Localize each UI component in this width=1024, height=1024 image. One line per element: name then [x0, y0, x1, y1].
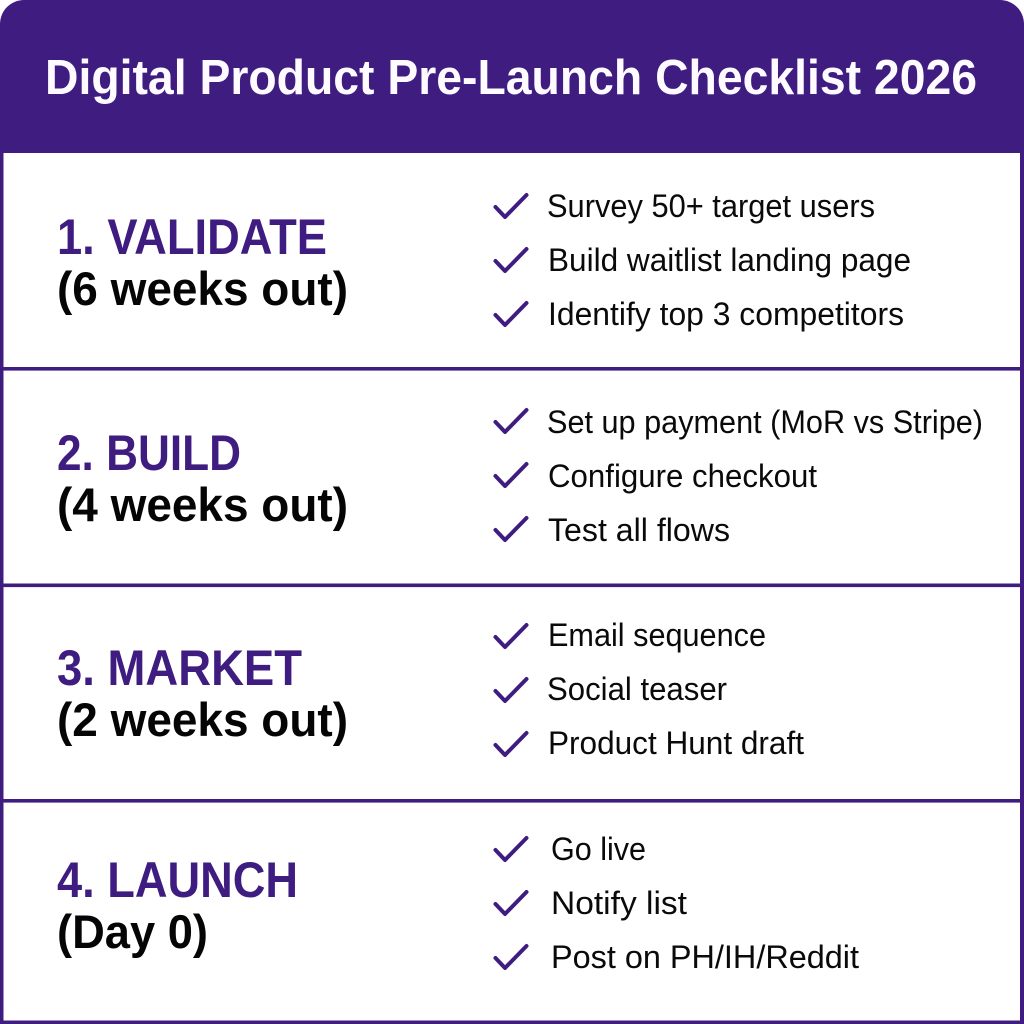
checklist: launch: Post on PH/IH/Reddit	[551, 939, 859, 975]
heading: market: (2 weeks out)	[57, 693, 348, 746]
checklist: build: Set up payment (MoR vs Stripe)	[547, 404, 983, 440]
checklist: validate	[496, 188, 911, 332]
heading: build	[57, 425, 348, 531]
heading: build: 2. BUILD	[57, 425, 241, 481]
panel: market	[57, 617, 804, 761]
heading: market: 3. MARKET	[57, 640, 302, 696]
heading: validate: (6 weeks out)	[57, 262, 348, 315]
heading: validate: 1. VALIDATE	[57, 209, 327, 265]
checklist: build: Configure checkout	[548, 458, 817, 494]
checklist: validate: Survey 50+ target users	[547, 188, 875, 224]
heading: market	[57, 640, 348, 746]
heading: validate	[57, 209, 348, 315]
heading: launch	[57, 852, 298, 958]
checklist: build	[496, 404, 983, 548]
checklist: market: Email sequence	[548, 617, 766, 653]
checklist: market: Product Hunt draft	[548, 725, 804, 761]
checklist: launch	[496, 831, 859, 975]
heading: launch: 4. LAUNCH	[57, 852, 298, 908]
checklist: validate: Identify top 3 competitors	[548, 296, 904, 332]
checklist: launch: Go live	[551, 831, 646, 867]
heading: launch: (Day 0)	[57, 905, 208, 958]
checklist: build: Test all flows	[548, 512, 730, 548]
header band	[0, 0, 1024, 153]
panel: build	[57, 404, 983, 548]
checklist: market	[496, 617, 804, 761]
checklist: validate: Build waitlist landing page	[548, 242, 911, 278]
panel: validate	[57, 188, 911, 332]
title: Digital Product Pre-Launch Checklist 2026	[45, 51, 977, 105]
checklist: launch: Notify list	[551, 885, 687, 921]
checklist: market: Social teaser	[547, 671, 727, 707]
panel: launch	[57, 831, 859, 975]
heading: build: (4 weeks out)	[57, 478, 348, 531]
